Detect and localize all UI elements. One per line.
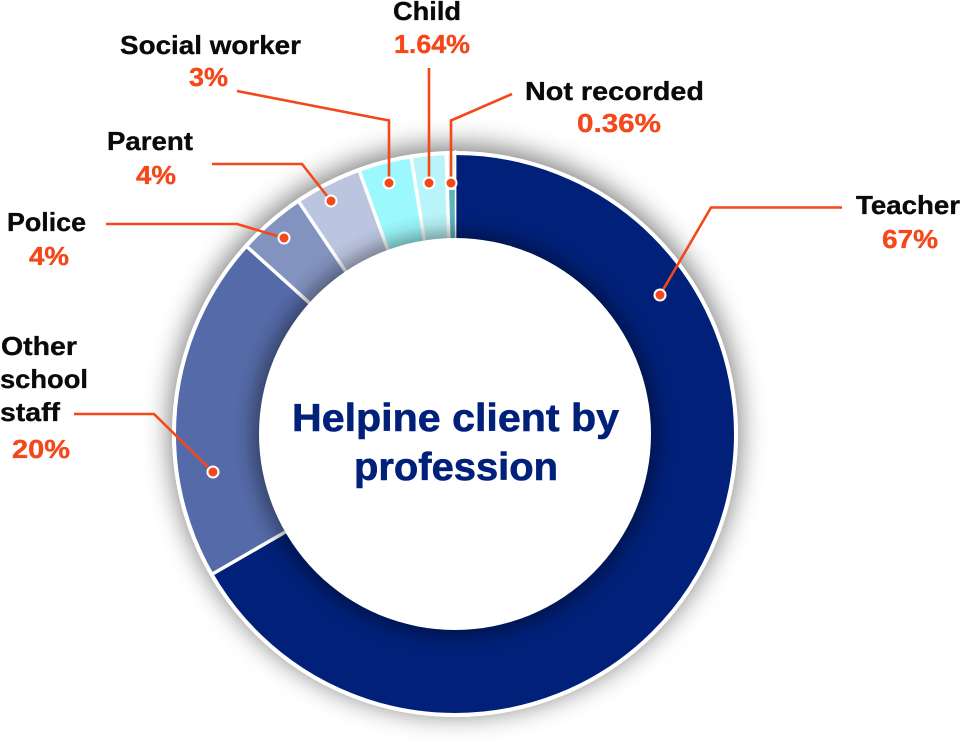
label: Police 4%: Police <box>7 207 86 237</box>
segment dividers <box>212 150 456 574</box>
label: Other school staff 20%: Other <box>1 331 77 361</box>
label: Child 1.64% <box>393 0 470 59</box>
label: Teacher 67%: Teacher <box>856 190 960 220</box>
label: Police 4% <box>7 207 86 271</box>
title: Helpine client by <box>292 397 619 440</box>
label: Social worker 3%: 3% <box>189 62 228 92</box>
label: Parent 4%: 4% <box>136 160 176 190</box>
segment: Parent 4% <box>298 170 390 276</box>
ring shadow <box>170 145 740 715</box>
label: Parent 4% <box>107 126 193 190</box>
leader: Other school staff <box>74 414 218 478</box>
label: Other school staff 20%: school <box>0 364 88 394</box>
title <box>292 397 619 489</box>
label: Not recorded 0.36%: 0.36% <box>577 108 661 138</box>
centre circle <box>259 238 651 630</box>
label: Other school staff 20%: staff <box>0 397 60 427</box>
donut chart <box>172 150 738 717</box>
outer white edge <box>174 153 736 715</box>
inner shading <box>175 154 735 714</box>
label: Social worker 3% <box>120 30 301 92</box>
label: Teacher 67%: 67% <box>882 224 938 254</box>
segment: Child 1.64% <box>411 153 449 246</box>
label: Not recorded 0.36%: Not recorded <box>525 76 704 106</box>
label: Parent 4%: Parent <box>107 126 193 156</box>
label: Other school staff 20% <box>0 331 88 464</box>
label: Other school staff 20%: 20% <box>12 434 70 464</box>
segment: Social worker 3% <box>359 156 425 256</box>
leader: Not recorded <box>446 94 512 188</box>
segment: Not recorded 0.36% <box>449 190 455 244</box>
label: Child 1.64%: 1.64% <box>394 29 470 59</box>
segment: Other school staff 20% <box>174 246 314 574</box>
label: Social worker 3%: Social worker <box>120 30 301 60</box>
title: profession <box>354 446 558 489</box>
label: Police 4%: 4% <box>29 241 69 271</box>
segment: Police 4% <box>246 201 349 307</box>
segment: Teacher 67% <box>212 153 736 715</box>
leader: Teacher <box>654 208 842 300</box>
label: Not recorded 0.36% <box>525 76 704 138</box>
leader: Police <box>106 224 290 244</box>
leader: Social worker <box>237 91 394 188</box>
leader: Parent <box>212 164 336 206</box>
leader: Child <box>424 68 434 188</box>
label: Teacher 67% <box>856 190 960 254</box>
